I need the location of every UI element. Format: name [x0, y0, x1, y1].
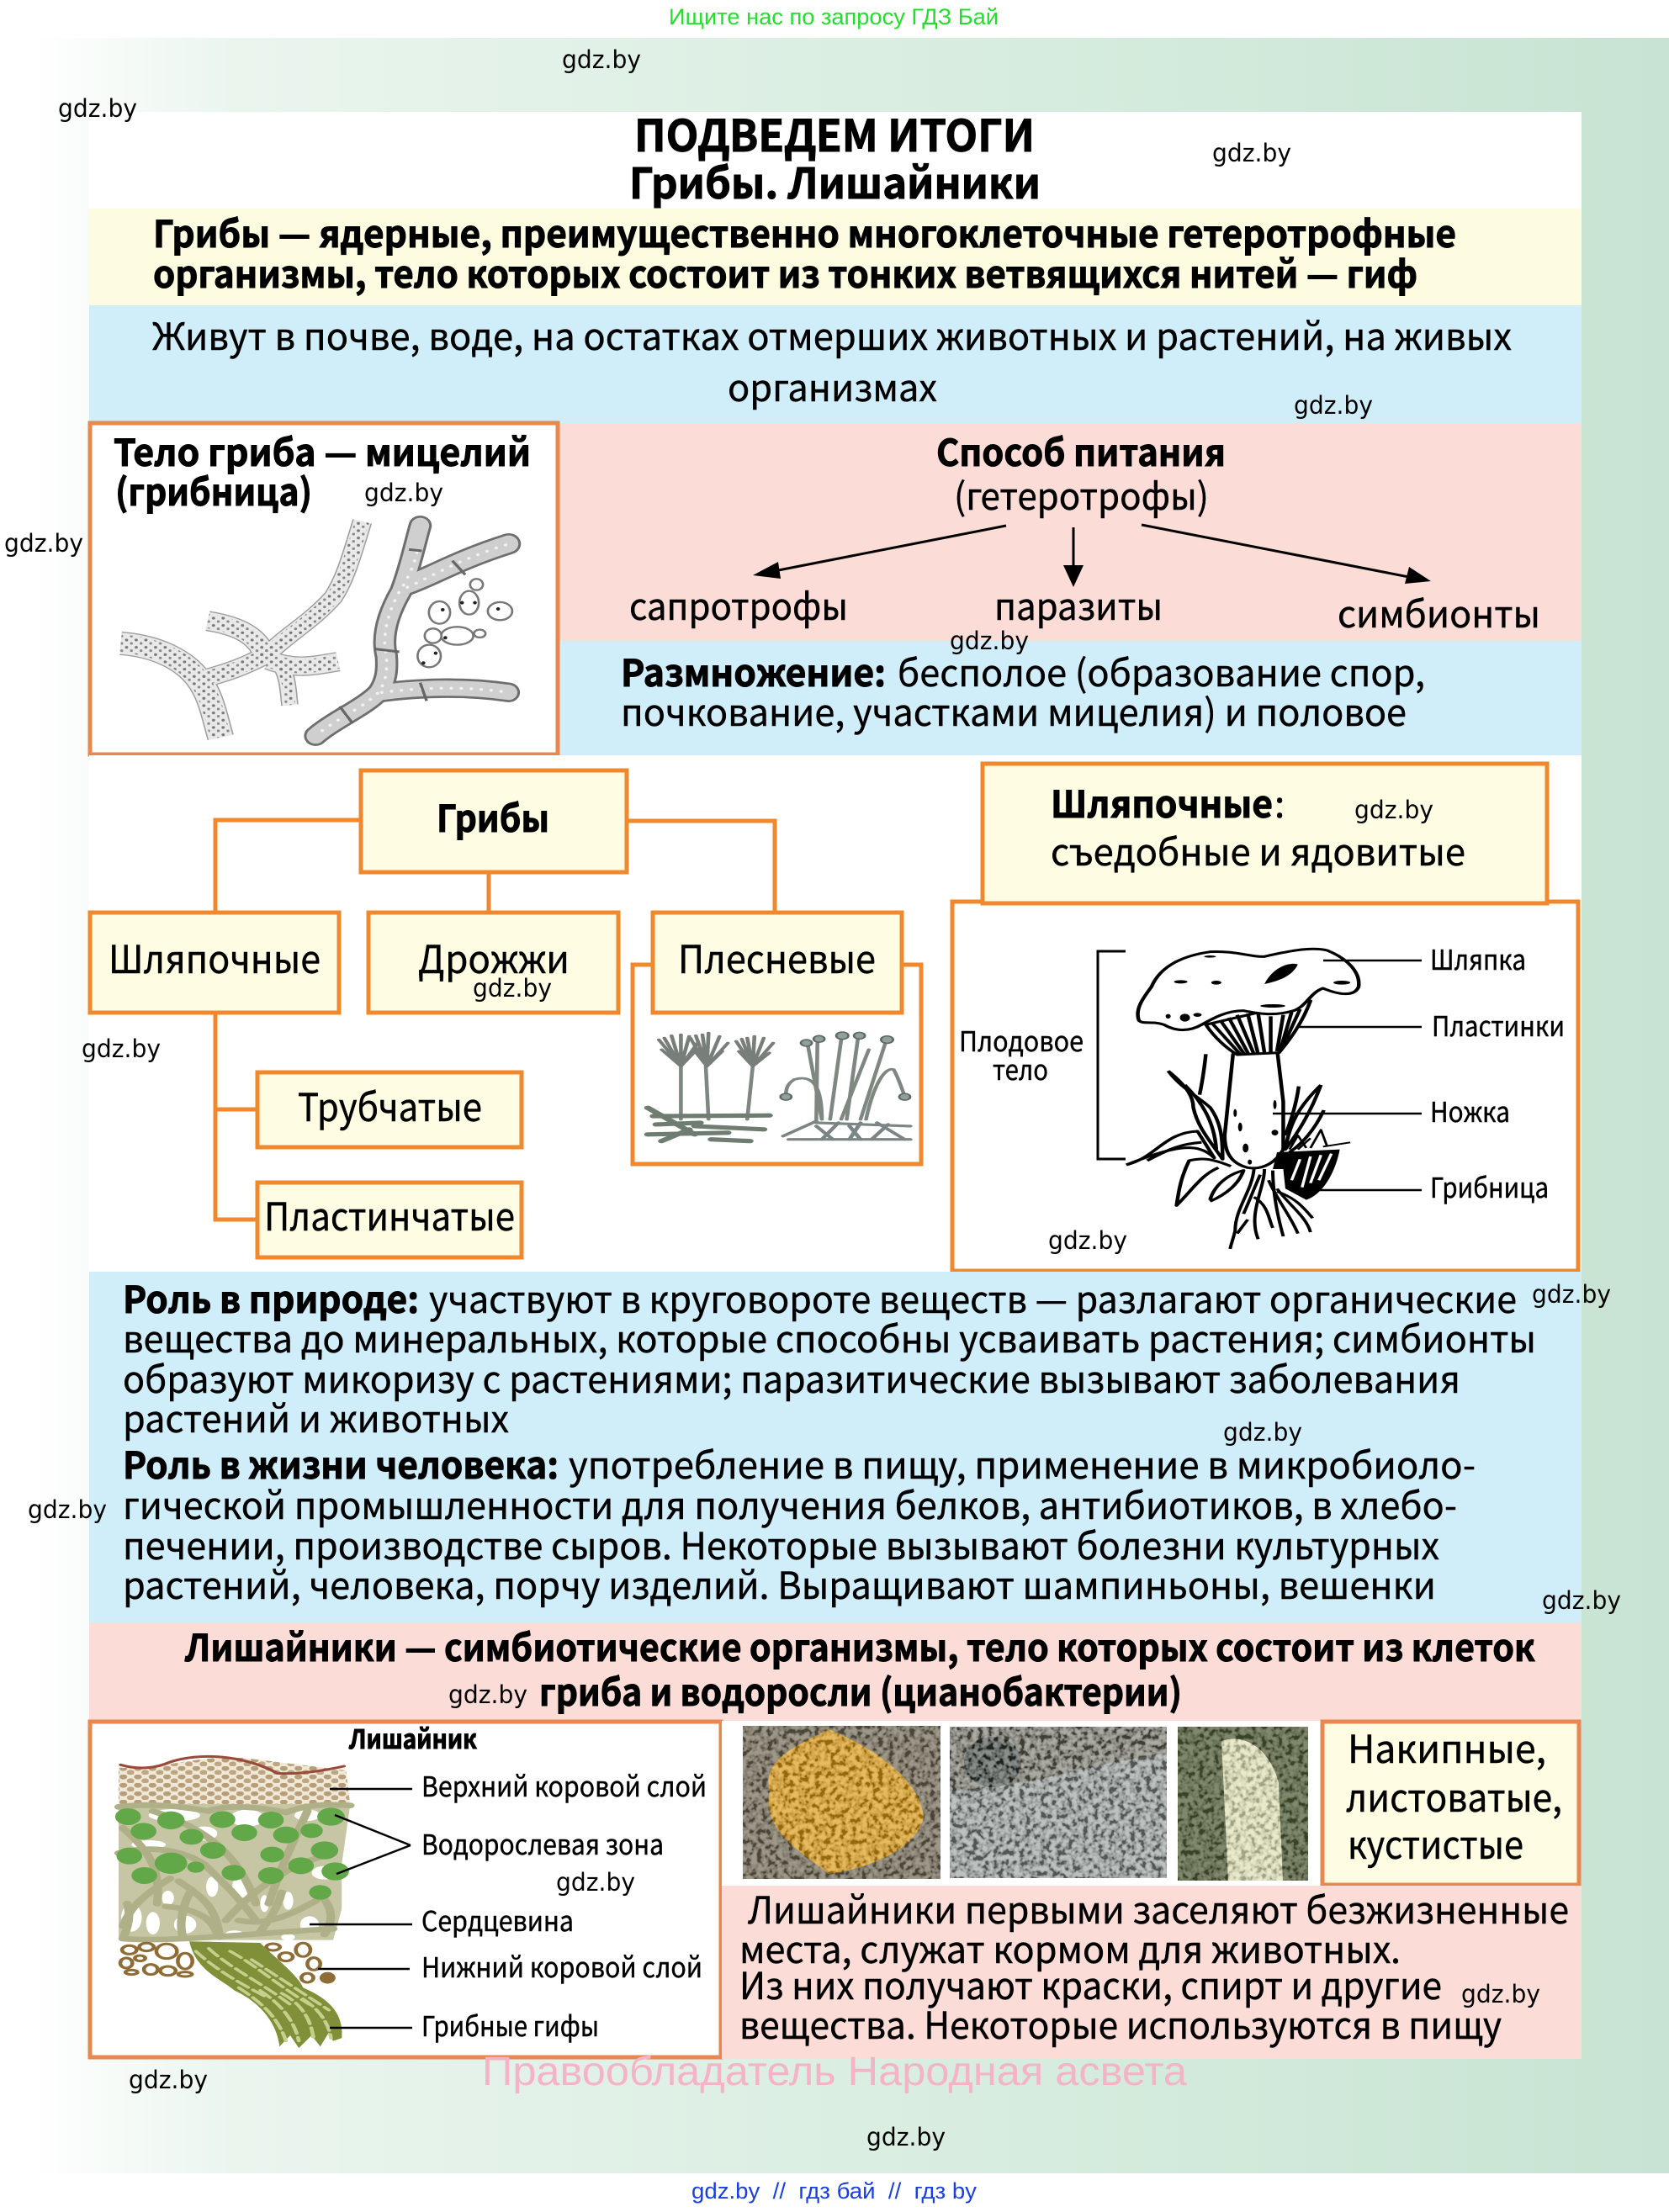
label: fruiting body: тело [993, 1048, 1048, 1088]
box: Плесневые [653, 913, 902, 1013]
leaders and labels: lichen layers [310, 1765, 707, 2045]
leaders and labels: mushroom parts: Шляпка [1430, 938, 1526, 978]
gdz.by watermarks: gdz.by [556, 1868, 635, 1897]
box: cap mushrooms heading: съедобные и ядовитые [1051, 823, 1465, 876]
text block: role in human life: гической промышленности для получения белков, антибиотиков, в хлебо- [123, 1476, 1457, 1530]
illustration: cap mushroom [1126, 949, 1359, 1249]
leaders and labels: lichen layers: Сердцевина [421, 1899, 574, 1939]
gdz.by watermarks: gdz.by [562, 45, 641, 74]
panel: lichen definition: гриба и водоросли (цианобактерии) [539, 1663, 1182, 1717]
leaders and labels: mushroom parts: Пластинки [1432, 1004, 1565, 1045]
box: Шляпочные: Шляпочные [109, 929, 321, 985]
panel: mode of nutrition: симбионты [1338, 585, 1540, 638]
panel: habitat: организмах [728, 358, 937, 412]
box: cap mushrooms heading: : [1274, 775, 1285, 828]
panel: role in nature and human life [89, 1270, 1582, 1622]
arrow: to saprotrophs [753, 526, 1006, 579]
box: Шляпочные [90, 913, 339, 1013]
panel: title: ПОДВЕДЕМ ИТОГИ [634, 101, 1035, 164]
leaders and labels: mushroom parts: Грибница [1430, 1166, 1549, 1206]
gdz.by watermarks: gdz.by [1461, 1980, 1540, 2008]
gdz.by watermarks: gdz.by [448, 1680, 527, 1709]
gdz.by watermarks: gdz.by [1294, 391, 1373, 420]
panel: lichen definition [89, 1618, 1582, 1721]
text block: role in nature: образуют микоризу с растениями; паразитические вызывают заболевания [123, 1350, 1460, 1404]
panel: habitat [89, 305, 1582, 423]
gdz.by watermarks: gdz.by [364, 479, 443, 507]
photo: crustose lichen [743, 1726, 940, 1879]
top search caption: Ищите нас по запросу ГДЗ Бай [669, 4, 999, 29]
panel: mushroom diagram [952, 902, 1578, 1271]
panel: mode of nutrition: Способ питания [936, 423, 1226, 477]
panel: lichen importance: Из них получают краски, спирт и другие [739, 1956, 1442, 2010]
leaders and labels: mushroom parts [1273, 938, 1565, 1206]
bottom site caption: gdz.by // гдз бай // гдз by [691, 2178, 978, 2204]
gdz.by watermarks: gdz.by [82, 1035, 161, 1063]
box: lichen types: листоватые, [1346, 1768, 1562, 1823]
gdz.by watermarks: gdz.by [866, 2123, 946, 2151]
gdz.by watermarks: gdz.by [1542, 1586, 1621, 1615]
text block: role in human life [123, 1436, 1476, 1610]
panel: mycelium [90, 423, 558, 754]
gdz.by watermarks: gdz.by [28, 1495, 107, 1524]
text block: role in nature [123, 1270, 1536, 1443]
gdz.by watermarks: gdz.by [473, 974, 552, 1003]
gdz.by watermarks: gdz.by [1223, 1418, 1302, 1447]
panel: reproduction [559, 641, 1582, 755]
panel: reproduction: бесполое (образование спор, [898, 643, 1425, 697]
panel: lichen cross-section: Лишайник [348, 1718, 477, 1756]
panel: habitat: Живут в почве, воде, на остатках отмерших животных и растений, на живых [152, 307, 1512, 361]
text block: role in human life: Роль в жизни человека: [123, 1436, 559, 1490]
panel: mycelium: (грибница) [115, 463, 312, 516]
leaders and labels: lichen layers: Верхний коровой слой [421, 1765, 707, 1805]
arrow: to parasites [1063, 527, 1084, 587]
text block: role in nature: Роль в природе: [123, 1270, 419, 1324]
box: Дрожжи [368, 913, 618, 1013]
leaders and labels: lichen layers: Нижний коровой слой [421, 1945, 702, 1986]
illustration: mold fungi [648, 1032, 910, 1141]
box: Трубчатые: Трубчатые [298, 1077, 482, 1133]
text block: role in nature: вещества до минеральных, которые способны усваивать растения; симбионты [123, 1310, 1536, 1363]
illustration: lichen layers [115, 1756, 350, 2048]
text block: role in nature: растений и животных [123, 1389, 509, 1443]
gdz.by watermarks: gdz.by [1354, 796, 1433, 824]
box: Плесневые: Плесневые [678, 929, 876, 985]
box: Трубчатые [257, 1072, 522, 1147]
box: lichen types [1322, 1719, 1579, 1885]
box: Дрожжи: Дрожжи [418, 929, 570, 985]
gdz.by watermarks: gdz.by [1048, 1226, 1127, 1255]
label: fruiting body [959, 1019, 1084, 1088]
box: Грибы: Грибы [437, 789, 549, 843]
panel: mode of nutrition: сапротрофы [629, 577, 848, 631]
gdz.by watermarks: gdz.by [1212, 139, 1291, 167]
gdz.by watermarks: gdz.by [58, 94, 137, 123]
leaders and labels: lichen layers: Грибные гифы [421, 2004, 599, 2045]
box: lichen types: Накипные, [1348, 1719, 1546, 1775]
gdz.by watermarks: gdz.by [129, 2066, 208, 2094]
photo: fruticose lichen [1178, 1727, 1308, 1881]
gdz.by watermarks: gdz.by [4, 529, 83, 558]
box: Грибы [361, 770, 627, 872]
panel: reproduction: почкование, участками мицелия) и половое [621, 683, 1407, 737]
panel: title [89, 101, 1582, 211]
illustration: mycelium hyphae and yeast cells [121, 521, 512, 738]
label: fruiting body: Плодовое [959, 1019, 1084, 1060]
text block: role in human life: печении, производстве сыров. Некоторые вызывают болезни культурных [123, 1516, 1439, 1570]
leaders and labels: mushroom parts: Ножка [1430, 1090, 1510, 1130]
panel: definition of fungi [89, 204, 1582, 305]
text block: role in human life: употребление в пищу, применение в микробиоло- [569, 1436, 1476, 1490]
leaders and labels: lichen layers: Водорослевая зона [421, 1823, 664, 1863]
connectors [215, 820, 921, 1220]
panel: lichen definition: Лишайники — симбиотические организмы, тело которых состоит из клеток [184, 1618, 1535, 1672]
box: cap mushrooms heading [983, 764, 1547, 903]
gdz.by watermarks: gdz.by [1532, 1280, 1611, 1309]
rights-holder watermark: Правообладатель Народная асвета [482, 2050, 1187, 2094]
panel: mode of nutrition: паразиты [994, 577, 1163, 631]
panel: definition of fungi: Грибы — ядерные, преимущественно многоклеточные гетеротрофные [153, 204, 1456, 258]
panel: lichen importance [722, 1881, 1582, 2059]
box: Пластинчатые: Пластинчатые [264, 1187, 515, 1242]
gdz.by watermarks: gdz.by [950, 627, 1029, 655]
panel: lichen importance: места, служат кормом для животных. [739, 1920, 1401, 1974]
box: Пластинчатые [257, 1183, 522, 1257]
box: cap mushrooms heading: Шляпочные [1051, 775, 1273, 828]
arrow: to symbionts [1142, 525, 1431, 584]
photo: foliose lichen [950, 1727, 1167, 1878]
box: lichen types: кустистые [1348, 1815, 1523, 1871]
panel: lichen cross-section [90, 1718, 721, 2057]
text block: role in human life: растений, человека, порчу изделий. Выращивают шампиньоны, вешенки [123, 1556, 1436, 1610]
panel: mode of nutrition: (гетеротрофы) [954, 467, 1209, 521]
panel: classification diagram [89, 755, 1582, 1272]
panel: title: Грибы. Лишайники [629, 151, 1041, 211]
bracket: fruiting body [1098, 951, 1126, 1159]
panel: definition of fungi: организмы, тело которых состоит из тонких ветвящихся нитей — гиф [153, 245, 1417, 299]
panel: lichen importance: вещества. Некоторые используются в пищу [739, 1996, 1502, 2050]
panel: mycelium: Тело гриба — мицелий [114, 423, 531, 477]
text block: role in nature: участвуют в круговороте веществ — разлагают органические [429, 1270, 1517, 1324]
panel: mode of nutrition [559, 423, 1582, 641]
panel: lichen photos [722, 1721, 1323, 1886]
panel: reproduction: Размножение: [621, 643, 886, 697]
panel: lichen importance: Лишайники первыми заселяют безжизненные [748, 1881, 1569, 1934]
